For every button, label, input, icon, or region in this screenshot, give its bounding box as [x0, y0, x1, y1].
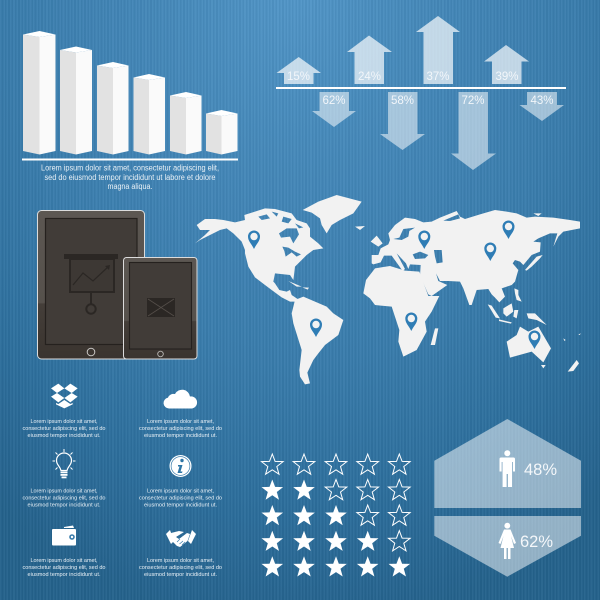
bar 4 — [134, 74, 165, 154]
bar 6 — [206, 110, 238, 154]
feature: wallet: eiusmod tempor incididunt ut. — [28, 572, 101, 578]
pin: north america — [248, 230, 260, 249]
down arrow 58%: 58% — [391, 95, 414, 107]
north america — [195, 208, 323, 302]
feature: box: Lorem ipsum dolor sit amet, — [30, 419, 98, 425]
feature: light bulb: eiusmod tempor incididunt ut. — [28, 503, 101, 509]
up arrow 39%: 39% — [495, 71, 519, 83]
bar chart — [23, 31, 238, 154]
feature: wallet: Lorem ipsum dolor sit amet, — [30, 558, 98, 564]
up arrow 39% — [484, 45, 529, 84]
panel: male share — [434, 419, 581, 508]
bar 2 — [60, 46, 92, 154]
up arrow 24% — [347, 36, 392, 84]
icon: man — [500, 450, 515, 487]
bar chart caption: Lorem ipsum dolor sit amet, consectetur adipiscing elit, — [41, 164, 219, 172]
icon: wallet — [52, 526, 76, 546]
feature: handshake: Lorem ipsum dolor sit amet, — [147, 558, 214, 564]
pin: south america — [310, 318, 322, 337]
star rating grid — [262, 454, 410, 576]
oceania — [488, 288, 581, 372]
icon: envelope — [147, 298, 175, 317]
bar 1 — [23, 31, 56, 154]
pin: russia — [502, 220, 514, 239]
home button — [87, 348, 95, 356]
down arrow 43%: 43% — [530, 95, 554, 107]
feature: handshake — [139, 530, 222, 578]
feature: cloud: consectetur adipiscing elit, sed do — [139, 426, 222, 432]
bar 5 — [170, 92, 202, 154]
feature: wallet — [22, 526, 106, 578]
icon: info circle — [170, 455, 192, 477]
feature: info: Lorem ipsum dolor sit amet, — [147, 489, 214, 495]
south america, greenland and iceland — [292, 195, 365, 384]
up arrow 15%: 15% — [287, 71, 310, 83]
feature: box — [22, 384, 106, 439]
feature: light bulb: consectetur adipiscing elit, sed do — [22, 496, 106, 502]
feature: box: consectetur adipiscing elit, sed do — [22, 426, 106, 432]
icon: handshake — [166, 530, 196, 547]
down arrow 62%: 62% — [322, 95, 346, 107]
icon: presentation board — [64, 254, 118, 314]
bar chart caption: magna aliqua. — [108, 182, 152, 191]
up arrow 24%: 24% — [358, 71, 381, 83]
icon: light bulb — [52, 449, 76, 478]
down arrow 43% — [520, 92, 564, 121]
down arrow 72% — [451, 92, 496, 170]
icon: cloud — [164, 390, 197, 408]
large tablet — [38, 210, 144, 359]
bar chart caption: sed do eiusmod tempor incididunt ut labore et dolore — [44, 173, 216, 182]
feature: light bulb: Lorem ipsum dolor sit amet, — [30, 489, 98, 495]
feature: cloud: eiusmod tempor incididunt ut. — [144, 433, 217, 439]
feature: info — [139, 455, 222, 509]
up arrow 37% — [416, 16, 460, 84]
pin: europe — [418, 230, 430, 249]
pin: africa — [405, 312, 417, 331]
africa — [363, 266, 439, 357]
world map — [195, 195, 581, 384]
bar 3 — [97, 62, 128, 154]
feature: info: consectetur adipiscing elit, sed do — [139, 496, 222, 502]
feature: cloud: Lorem ipsum dolor sit amet, — [147, 419, 214, 425]
male percentage: 48% — [524, 461, 557, 479]
feature: cloud — [139, 390, 222, 439]
feature: handshake: eiusmod tempor incididunt ut. — [144, 572, 217, 578]
arrow chart — [276, 16, 566, 170]
up arrow 15% — [276, 57, 321, 84]
down arrow 62% — [312, 92, 356, 127]
pin: china — [484, 242, 496, 261]
feature: info: eiusmod tempor incididunt ut. — [144, 503, 217, 509]
down arrow 58% — [380, 92, 425, 150]
feature: box: eiusmod tempor incididunt ut. — [28, 433, 101, 439]
feature: handshake: consectetur adipiscing elit, sed do — [139, 565, 222, 571]
eurasia — [371, 210, 580, 305]
small tablet — [124, 258, 197, 359]
icon: woman — [498, 523, 516, 559]
bar chart caption — [41, 164, 219, 191]
panel: female share — [434, 516, 581, 577]
female percentage: 62% — [520, 533, 553, 551]
pin: australia — [528, 330, 540, 349]
home button — [158, 351, 163, 357]
icon: open box — [51, 384, 78, 408]
up arrow 37%: 37% — [426, 71, 450, 83]
feature: wallet: consectetur adipiscing elit, sed do — [22, 565, 106, 571]
feature: light bulb — [22, 449, 106, 509]
down arrow 72%: 72% — [461, 95, 485, 107]
